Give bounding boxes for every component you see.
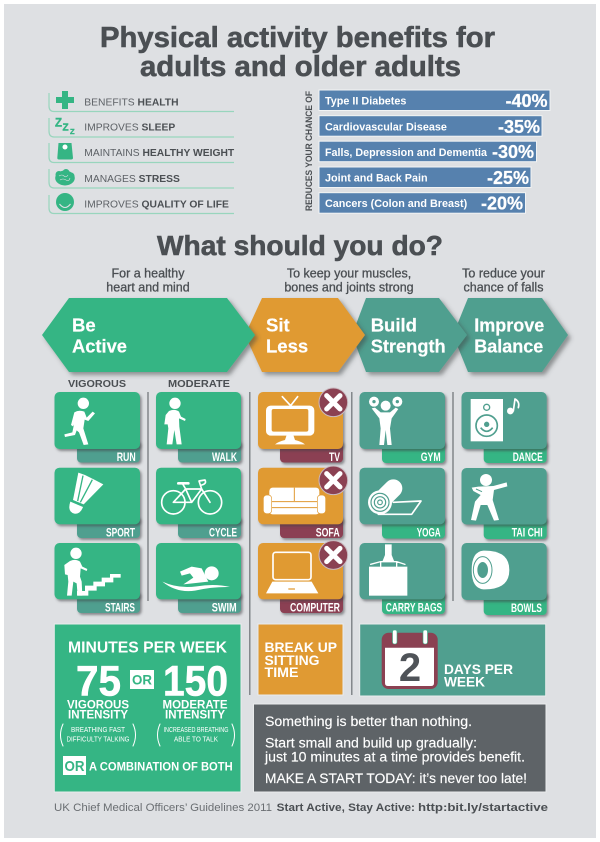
card: gym: GYM: [421, 452, 441, 464]
bar: type II diabetes: -40%: [505, 91, 548, 111]
hexagon: sit less: Less: [266, 336, 308, 357]
vigorous note: DIFFICULTY TALKING: [66, 735, 130, 744]
bar: falls, depression and dementia: [319, 141, 536, 162]
hexagon: build strength: Build: [371, 315, 417, 336]
panel: build strength cards: [360, 392, 445, 614]
card: sofa: SOFA: [316, 528, 340, 540]
card: tv: [258, 388, 348, 464]
bar: cancers: -20%: [481, 194, 523, 214]
hexagon: improve balance: Balance: [474, 336, 543, 357]
panel: improve balance cards: [462, 392, 547, 615]
card: swim: [156, 543, 241, 614]
bar: falls, depression and dementia: -30%: [492, 142, 534, 162]
icon: brain: [55, 169, 75, 186]
panel: advice: MAKE A START TODAY: it’s never too late!: [265, 771, 527, 786]
panel: minutes per week: [54, 624, 241, 792]
hexagon: sit less: Sit: [266, 315, 290, 336]
card: cycle: [156, 468, 241, 540]
bar: type II diabetes: [319, 90, 550, 111]
bar: cardiovascular disease: [319, 116, 542, 137]
number: 150: 150: [163, 658, 228, 706]
days per week text: DAYS PER: [444, 661, 513, 677]
subheading: healthy heart: heart and mind: [106, 280, 190, 294]
moderate intensity: [162, 700, 228, 722]
card: bowls: [462, 543, 547, 615]
title: [100, 22, 495, 83]
bar: joint and back pain: [319, 167, 531, 188]
benefit: quality of life: IMPROVES QUALITY OF LIFE: [84, 199, 229, 210]
card: run: [54, 392, 140, 464]
card: run: RUN: [117, 452, 136, 464]
subheading: falls: To reduce your: [462, 266, 545, 280]
moderate note: [158, 724, 234, 746]
card: sofa: [258, 466, 348, 540]
column label: vigorous: VIGOROUS: [68, 378, 126, 390]
moderate intensity: INTENSITY: [165, 710, 225, 722]
card: dance: [462, 392, 547, 464]
bar: cancers: Cancers (Colon and Breast): [325, 198, 468, 210]
benefit: weight: MAINTAINS HEALTHY WEIGHT: [84, 148, 235, 159]
panel: advice: Start small and build up gradually:: [265, 735, 477, 750]
card: tai chi: TAI CHI: [512, 528, 543, 540]
panel: vigorous cards: [54, 392, 140, 614]
hexagon: be active: Be: [72, 315, 96, 336]
hexagon: improve balance: Improve: [474, 315, 544, 336]
hexagon: be active: Active: [72, 336, 127, 357]
icon: sleep zzz: Z: [62, 123, 69, 134]
panel: advice: Something is better than nothing.: [265, 714, 472, 729]
heading: what should you do: What should you do?: [157, 230, 443, 261]
icon: sleep zzz: [55, 118, 75, 136]
panel: advice: [254, 704, 546, 792]
card: sport: [54, 468, 140, 540]
combination: [63, 756, 233, 775]
vigorous note: BREATHING FAST: [71, 725, 125, 734]
icon: weighing scale: [57, 143, 73, 160]
moderate intensity: MODERATE: [162, 700, 228, 712]
panel: moderate cards: [156, 392, 241, 614]
panel: sit less cards: [258, 388, 348, 614]
number: 75: 75: [76, 658, 121, 706]
moderate note: INCREASED BREATHING: [164, 725, 229, 734]
panel: break up sitting time: BREAK UP: [264, 639, 337, 655]
card: walk: [156, 392, 241, 464]
card: computer: [258, 541, 348, 614]
vigorous intensity: [67, 700, 129, 722]
subheading: muscles: bones and joints strong: [284, 280, 414, 294]
bar: cancers: [319, 193, 526, 214]
hexagon: sit less: [245, 298, 365, 372]
card: tai chi: [462, 468, 547, 540]
vigorous intensity: INTENSITY: [68, 710, 128, 722]
vigorous intensity: VIGOROUS: [67, 700, 129, 712]
subheading: muscles: [284, 266, 414, 294]
benefit: sleep: IMPROVES SLEEP: [84, 123, 175, 134]
footer credit: UK Chief Medical Officers’ Guidelines 2011: [54, 802, 272, 814]
card: sport: SPORT: [106, 528, 135, 540]
icon: sleep zzz: Z: [70, 127, 75, 136]
footer credit: [54, 802, 548, 814]
card: carry bags: CARRY BAGS: [386, 602, 442, 614]
icon: sleep zzz: Z: [55, 118, 62, 130]
bar: cardiovascular disease: Cardiovascular Disease: [325, 122, 447, 134]
vigorous note: [60, 724, 136, 746]
icon: health cross: [56, 91, 74, 109]
card: bowls: BOWLS: [511, 603, 542, 615]
hexagon: improve balance: [453, 298, 568, 372]
vertical axis label: REDUCES YOUR CHANCE OF: [304, 90, 314, 211]
bar: joint and back pain: -25%: [487, 168, 529, 188]
title: adults and older adults: [140, 51, 461, 83]
badge: or: OR: [132, 672, 152, 688]
card: computer: COMPUTER: [290, 602, 341, 614]
hexagon: be active: [42, 298, 255, 372]
subheading: healthy heart: For a healthy: [112, 266, 185, 280]
bar: falls, depression and dementia: Falls, Depression and Dementia: [325, 147, 488, 159]
panel: two days per week: [360, 624, 546, 696]
column label: moderate: MODERATE: [168, 378, 230, 390]
panel: benefits list: [49, 91, 235, 214]
card: tv: TV: [329, 452, 340, 464]
combination: OR: [64, 758, 85, 775]
card: yoga: [360, 468, 445, 540]
card: dance: DANCE: [513, 452, 543, 464]
benefit: stress: MANAGES STRESS: [84, 174, 180, 185]
days per week text: WEEK: [444, 674, 485, 690]
card: cycle: CYCLE: [209, 528, 237, 540]
card: gym: [360, 392, 445, 464]
benefit: health: BENEFITS HEALTH: [84, 97, 179, 108]
card: yoga: YOGA: [417, 528, 441, 540]
hexagon: build strength: Strength: [371, 336, 446, 357]
combination: A COMBINATION OF BOTH: [89, 760, 233, 774]
hexagon: build strength: [352, 298, 467, 372]
footer credit: http:bit.ly/startactive: [418, 802, 548, 814]
card: walk: WALK: [212, 452, 238, 464]
card: swim: SWIM: [212, 602, 237, 614]
footer credit: Start Active, Stay Active:: [277, 802, 415, 814]
icon: smile: [56, 193, 74, 211]
subheading: healthy heart: [106, 266, 190, 294]
panel: break up sitting time: [258, 624, 343, 695]
days per week text: [444, 661, 513, 690]
subheading: muscles: To keep your muscles,: [287, 266, 411, 280]
panel heading: MINUTES PER WEEK: [68, 640, 228, 657]
bar: cardiovascular disease: -35%: [498, 117, 540, 137]
bar: type II diabetes: Type II Diabetes: [325, 96, 406, 108]
icon: calendar: 2: [399, 646, 421, 690]
moderate note: ABLE TO TALK: [174, 735, 218, 744]
bar: joint and back pain: Joint and Back Pain: [325, 172, 428, 184]
card: stairs: [54, 543, 140, 614]
subheading: falls: chance of falls: [464, 280, 543, 294]
icon: calendar: [382, 630, 438, 690]
panel: reduces your chance of: [304, 90, 550, 214]
panel: break up sitting time: SITTING: [264, 652, 320, 668]
panel: advice: just 10 minutes at a time provides benefit.: [264, 750, 525, 765]
card: carry bags: [360, 543, 445, 614]
card: stairs: STAIRS: [105, 602, 135, 614]
title: Physical activity benefits for: [100, 22, 495, 54]
panel: break up sitting time: TIME: [264, 664, 298, 680]
subheading: falls: [462, 266, 545, 294]
